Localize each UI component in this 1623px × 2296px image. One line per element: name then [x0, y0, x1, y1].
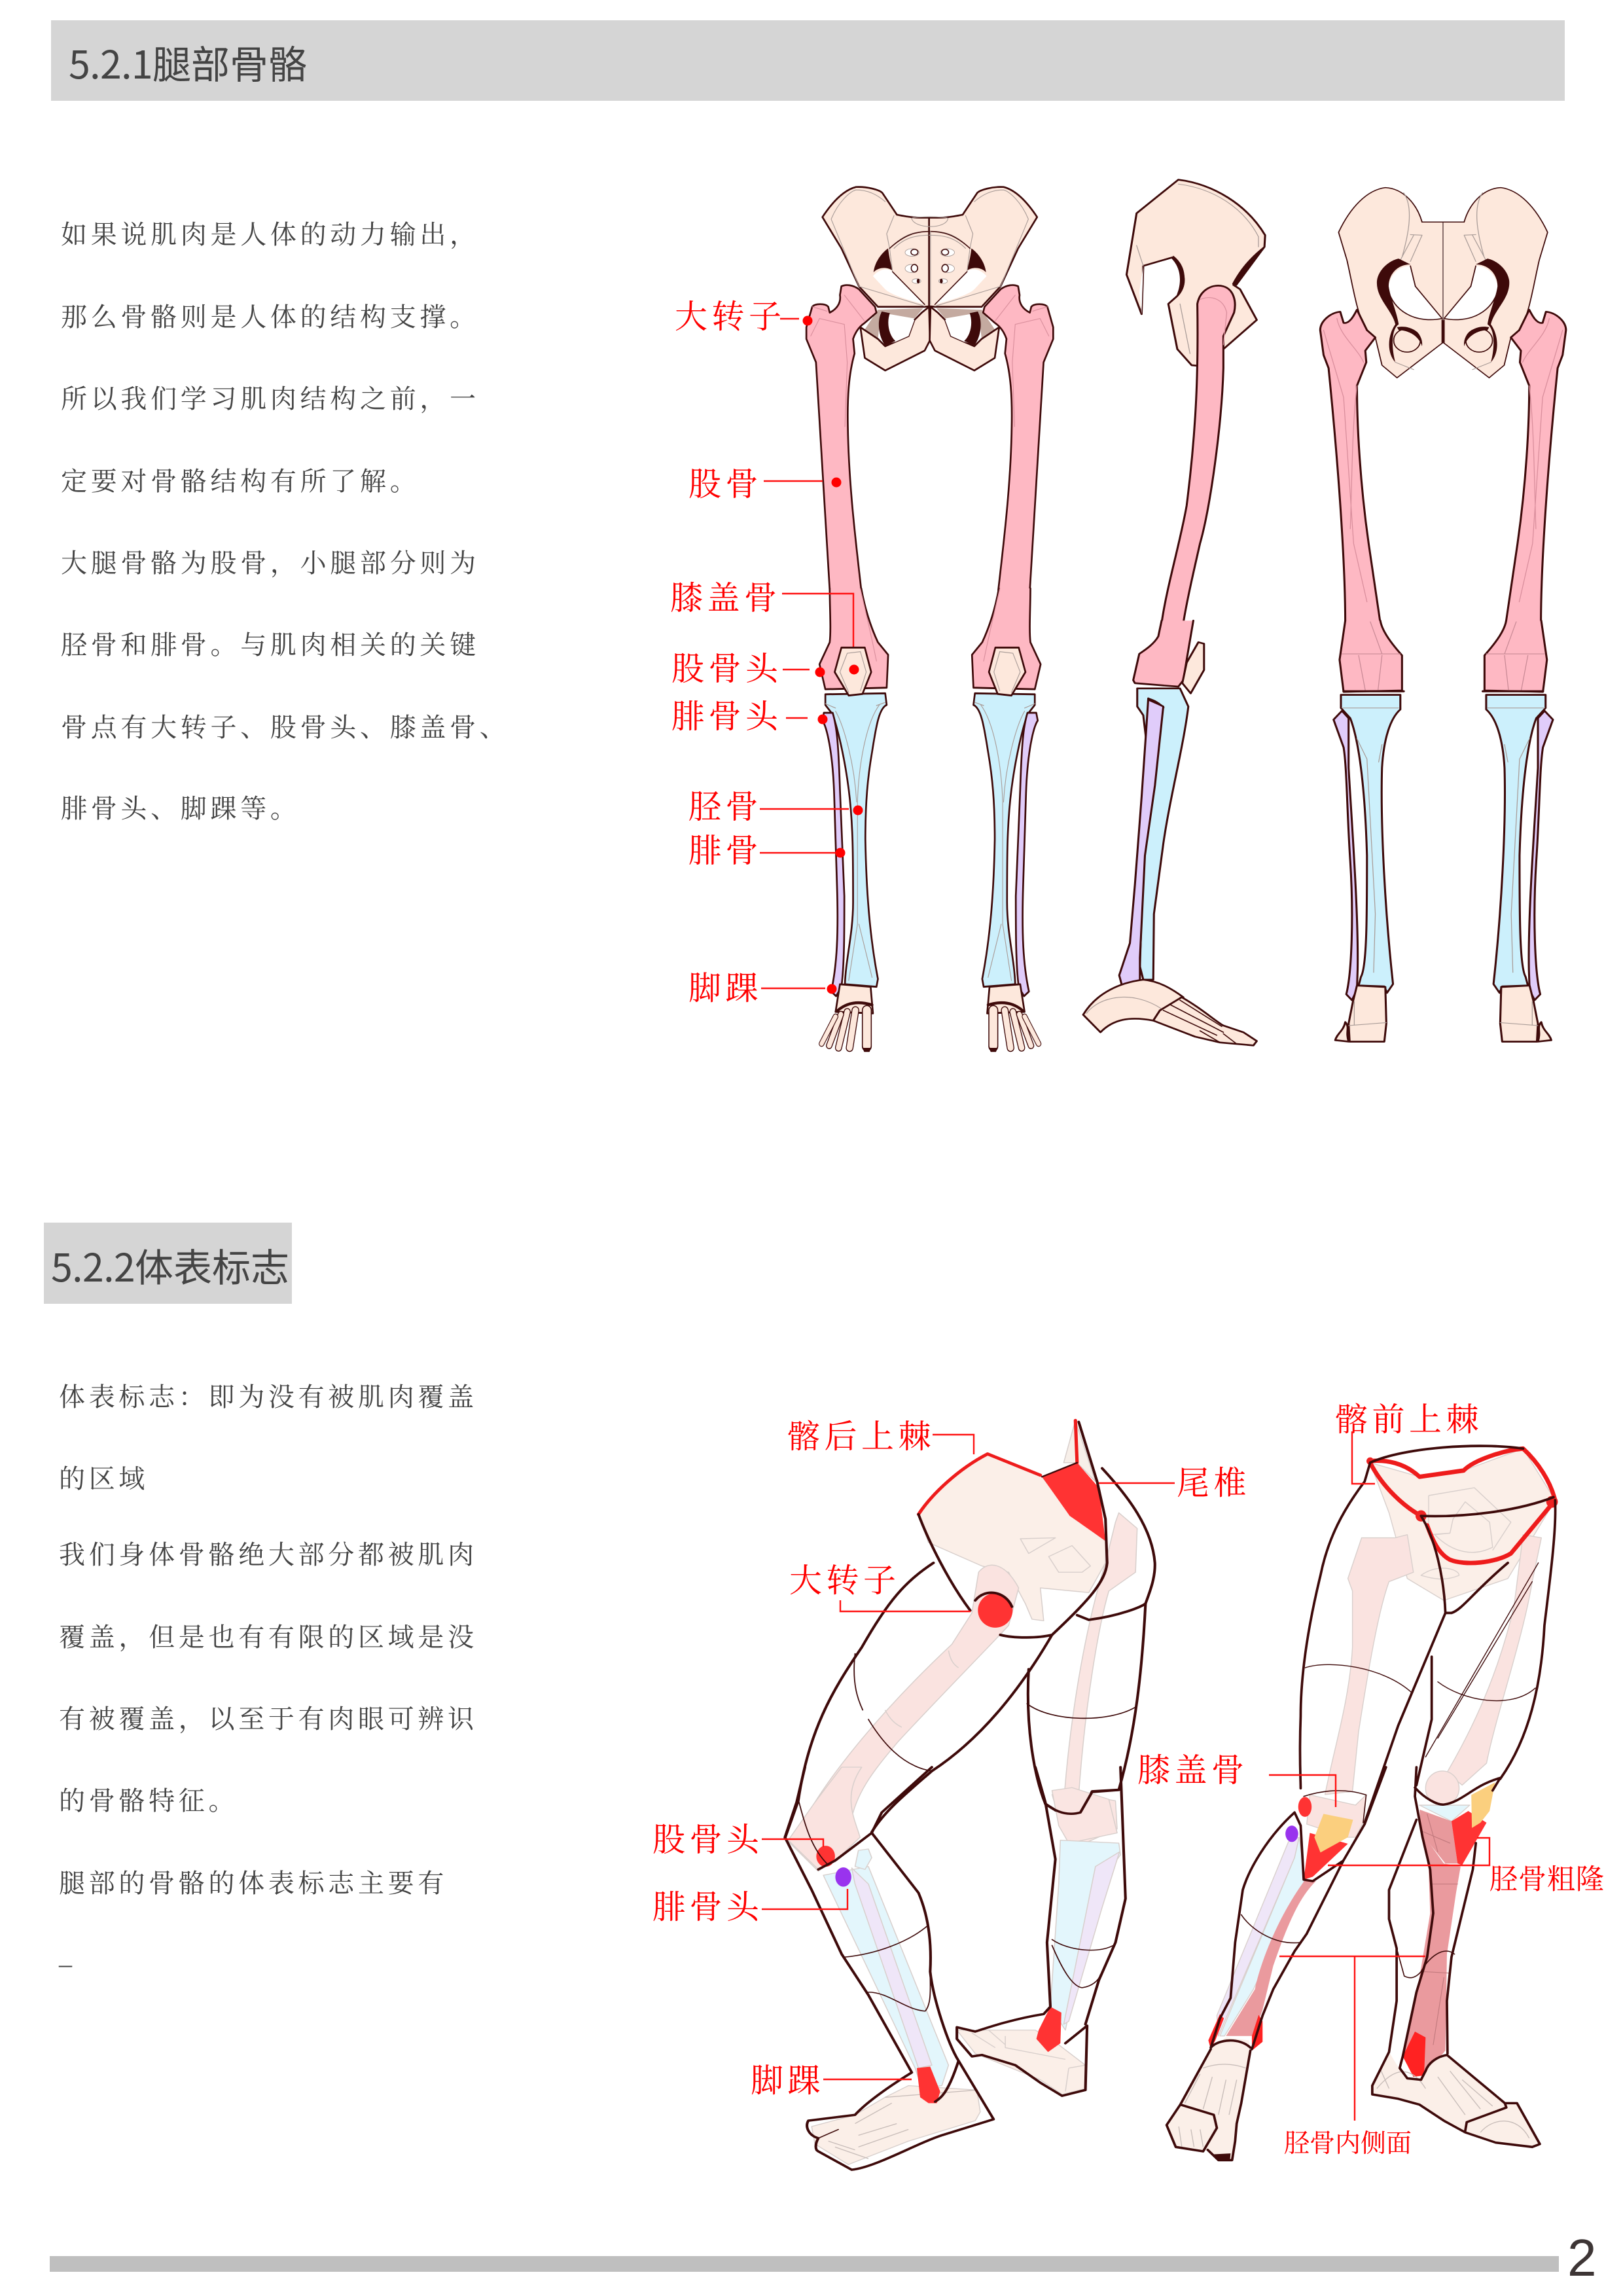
text block: surface landmarks explanation: 的区域 — [59, 1464, 149, 1494]
label: 胫骨: 胫骨 — [688, 789, 762, 825]
label: 股骨头: 股骨头 — [671, 651, 783, 687]
text block: leg bones introduction: 那么骨骼则是人体的结构支撑。 — [61, 302, 480, 332]
label: 胫骨粗隆 — [1328, 1838, 1605, 1895]
label: 脚踝 — [688, 970, 836, 1007]
diagram: leg skeleton in three views with labels — [670, 179, 1567, 1052]
label: 腓骨头 — [652, 1889, 847, 1926]
label: 股骨 — [688, 466, 842, 503]
label: 大转子: 大转子 — [675, 298, 785, 335]
heading: 5.2.2 surface landmarks — [44, 1223, 292, 1304]
diagram: surface landmarks on two posed legs — [652, 1401, 1605, 2171]
text block: surface landmarks explanation: 体表标志：即为没有被肌肉覆盖 — [59, 1382, 478, 1412]
figure: back view skeleton — [1320, 188, 1566, 1041]
label: 胫骨内侧面: 胫骨内侧面 — [1284, 2130, 1412, 2158]
label: 股骨头: 股骨头 — [652, 1821, 763, 1858]
text block: surface landmarks explanation: 覆盖，但是也有有限的区域是没 — [59, 1623, 478, 1652]
heading: 5.2.1 leg bones — [51, 20, 1565, 101]
heading: 5.2.1 leg bones: 5.2.1腿部骨骼 — [69, 34, 307, 90]
label: 大转子 — [789, 1562, 971, 1611]
label: 髂前上棘 — [1335, 1401, 1483, 1484]
label: 腓骨头: 腓骨头 — [652, 1889, 763, 1926]
label: 胫骨内侧面 — [1279, 1956, 1425, 2158]
label: 膝盖骨: 膝盖骨 — [670, 580, 781, 617]
figure: bent legs side view — [785, 1420, 1155, 2170]
label: 腓骨 — [688, 833, 846, 869]
label: 膝盖骨: 膝盖骨 — [1137, 1752, 1249, 1789]
footer bar — [50, 2256, 1559, 2272]
label: 腓骨头: 腓骨头 — [671, 698, 783, 735]
text block: leg bones introduction: 定要对骨骼结构有所了解。 — [61, 467, 419, 496]
figure: front view skeleton — [806, 187, 1053, 1052]
text block: leg bones introduction: 大腿骨骼为股骨，小腿部分则为 — [61, 548, 480, 578]
label: 胫骨粗隆: 胫骨粗隆 — [1489, 1865, 1605, 1895]
label: 脚踝: 脚踝 — [751, 2062, 825, 2099]
page number: 2 — [1567, 2229, 1597, 2287]
label: 尾椎: 尾椎 — [1177, 1465, 1251, 1501]
text block: leg bones introduction — [61, 220, 509, 823]
label: 脚踝: 脚踝 — [688, 970, 762, 1007]
label: 腓骨: 腓骨 — [688, 833, 762, 869]
text block: leg bones introduction: 胫骨和腓骨。与肌肉相关的关键 — [61, 630, 480, 660]
text block: leg bones introduction: 如果说肌肉是人体的动力输出， — [61, 220, 480, 249]
figure: legs front view — [1167, 1446, 1558, 2160]
label: 股骨: 股骨 — [688, 466, 762, 503]
label: 胫骨 — [688, 789, 863, 825]
text block: surface landmarks explanation: 有被覆盖，以至于有肉眼可辨识 — [59, 1704, 478, 1734]
figure: side view skeleton — [1083, 180, 1265, 1045]
label: 股骨头 — [652, 1821, 823, 1858]
label: 膝盖骨 — [670, 580, 859, 674]
text block: surface landmarks explanation: – — [59, 1949, 76, 1979]
text block: leg bones introduction: 骨点有大转子、股骨头、膝盖骨、 — [61, 713, 509, 742]
text block: leg bones introduction: 腓骨头、脚踝等。 — [61, 794, 300, 823]
text block: surface landmarks explanation: 的骨骼特征。 — [59, 1786, 238, 1816]
heading: 5.2.2 surface landmarks: 5.2.2体表标志 — [51, 1237, 289, 1293]
label: 膝盖骨 — [1137, 1752, 1336, 1807]
text block: surface landmarks explanation: 腿部的骨骼的体表标志主要有 — [59, 1869, 448, 1898]
text block: leg bones introduction: 所以我们学习肌肉结构之前，一 — [61, 384, 480, 414]
label: 髂后上棘: 髂后上棘 — [787, 1418, 935, 1455]
text block: surface landmarks explanation — [59, 1382, 478, 1979]
text block: surface landmarks explanation: 我们身体骨骼绝大部分都被肌肉 — [59, 1540, 478, 1570]
label: 髂前上棘: 髂前上棘 — [1335, 1401, 1483, 1438]
label: 大转子: 大转子 — [789, 1562, 901, 1599]
